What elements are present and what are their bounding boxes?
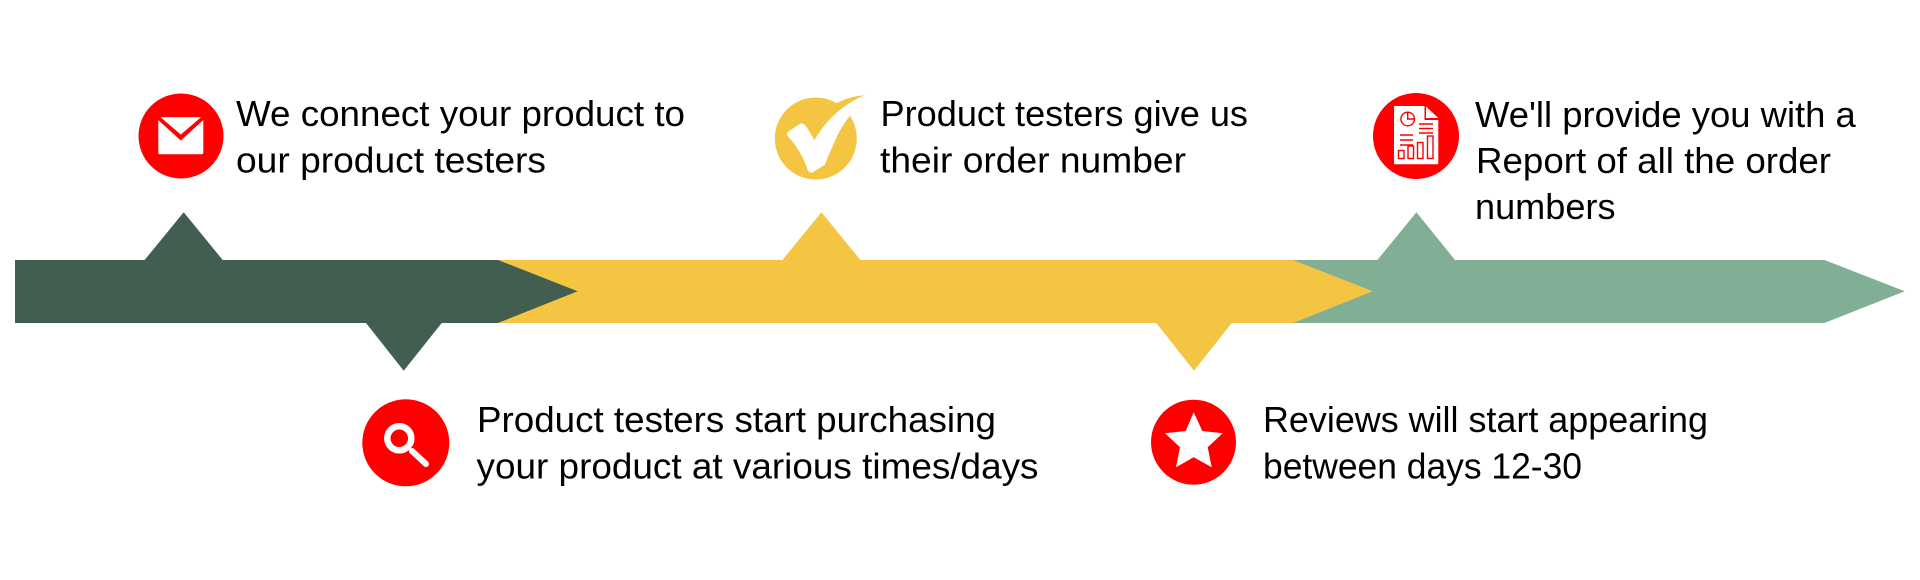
text: step 4: between days 12-30 — [1263, 446, 1582, 486]
text: step 4 — [1263, 399, 1708, 486]
text: step 5: Report of all the order — [1476, 140, 1831, 181]
text: step 5: We'll provide you with a — [1475, 94, 1857, 135]
step 4: reviews — [1151, 399, 1708, 486]
text: step 3: their order number — [880, 140, 1186, 180]
step 1: connect — [138, 93, 685, 180]
step 3: order number — [775, 93, 1248, 180]
timeline arrow — [15, 212, 1905, 371]
arrow segment: sage green with up pointer — [1290, 212, 1905, 323]
step 2: start purchasing — [362, 399, 1038, 486]
icon: magnifying glass — [362, 399, 449, 486]
text: step 5: numbers — [1475, 186, 1616, 227]
text: step 1: We connect your product to — [236, 93, 685, 134]
text: step 2: Product testers start purchasing — [477, 399, 996, 440]
icon: star — [1151, 400, 1236, 485]
text: step 2 — [476, 399, 1038, 486]
text: step 3: Product testers give us — [880, 93, 1248, 134]
text: step 2: your product at various times/days — [476, 446, 1038, 486]
text: step 4: Reviews will start appearing — [1263, 399, 1708, 440]
text: step 3 — [880, 93, 1248, 180]
text: step 5 — [1475, 94, 1857, 227]
icon: report document — [1373, 93, 1459, 179]
icon: check mark — [775, 95, 867, 180]
step 5: report — [1373, 93, 1857, 227]
icon: envelope — [138, 94, 224, 178]
text: step 1 — [236, 93, 685, 180]
arrow segment: dark green with up and down pointers — [15, 212, 578, 371]
text: step 1: our product testers — [236, 140, 546, 180]
arrow segment: yellow with up and down pointers — [490, 212, 1373, 371]
